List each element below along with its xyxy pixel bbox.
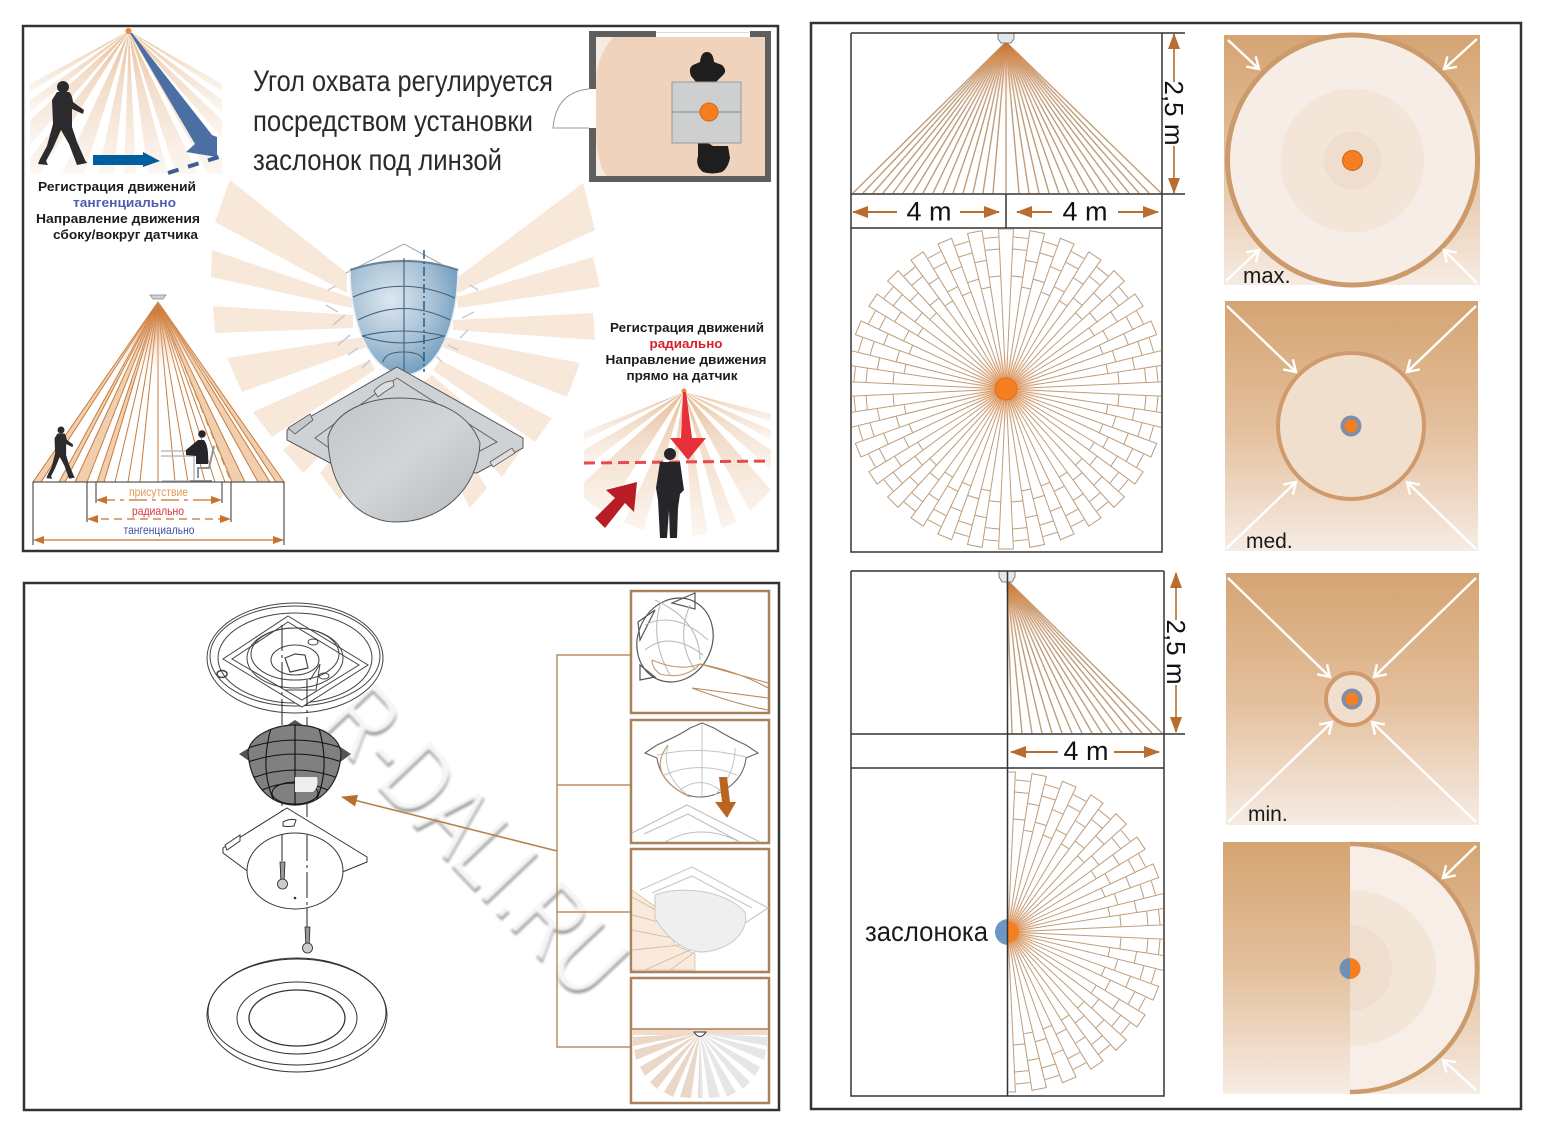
half disc top view xyxy=(1008,772,1163,1092)
coverage: half with shutter xyxy=(1223,842,1480,1094)
step four: resulting pattern xyxy=(631,978,769,1103)
axis over dome xyxy=(282,835,307,925)
tangential fan xyxy=(30,31,222,174)
title: заслонок под линзой xyxy=(253,144,502,177)
caption: radial: Направление движения xyxy=(606,352,766,367)
person head xyxy=(58,426,64,434)
shutter label: заслонока xyxy=(865,916,988,947)
tangential ray arrow xyxy=(130,33,217,157)
person bottom xyxy=(697,143,730,174)
range labels xyxy=(124,485,195,537)
plate clip left xyxy=(288,414,313,434)
caption: tangential xyxy=(36,179,200,242)
caption: tangential: тангенциально xyxy=(73,195,176,210)
door xyxy=(553,89,589,128)
plate clip top xyxy=(374,381,394,397)
title: Угол охвата регулируется xyxy=(253,65,553,98)
ceiling sensor xyxy=(150,295,166,299)
step one: fit shutter xyxy=(623,585,769,713)
title xyxy=(253,65,553,177)
coverage: med: med. xyxy=(1246,530,1293,553)
height dimension upper: 2,5 m xyxy=(1159,80,1189,146)
dashed movement boundary xyxy=(168,156,222,173)
coverage: min: min. xyxy=(1248,803,1288,826)
presence cone xyxy=(33,295,284,545)
sensor dot xyxy=(700,103,718,121)
caption: radial: Регистрация движений xyxy=(610,320,764,335)
half cone side view xyxy=(999,571,1162,733)
panel: assembly xyxy=(24,583,779,1110)
central fan of rays xyxy=(211,180,600,508)
table xyxy=(672,82,741,143)
width dimension right: 4 m xyxy=(1062,196,1108,226)
screw two xyxy=(302,927,312,953)
sensor point xyxy=(126,28,132,34)
full disc top view xyxy=(845,228,1167,550)
width dimension lower: 4 m xyxy=(1063,736,1109,766)
frame upper xyxy=(851,33,1185,552)
coverage: max xyxy=(1224,35,1480,288)
room plan xyxy=(553,31,771,182)
plate clip right xyxy=(490,448,515,467)
standing person xyxy=(656,448,684,538)
watermark: R-DALI.RU xyxy=(302,663,650,1021)
top mounting ring xyxy=(207,603,383,713)
caption: tangential: сбоку/вокруг датчика xyxy=(53,227,199,242)
sensor xyxy=(999,571,1015,582)
caption: radial xyxy=(606,320,766,383)
pointer arrow xyxy=(342,797,557,851)
red dashed line xyxy=(584,461,771,463)
person top xyxy=(690,52,725,82)
range labels: радиально xyxy=(132,504,184,518)
sensor dot xyxy=(995,378,1017,400)
person head xyxy=(57,81,69,93)
insertion arrow xyxy=(715,777,736,818)
screw one xyxy=(278,862,288,889)
lens shutter frame xyxy=(346,244,458,273)
height dimension lower: 2,5 m xyxy=(1161,619,1191,685)
panel: coverage xyxy=(811,23,1521,1109)
seated person at desk xyxy=(161,451,195,481)
big red arrow xyxy=(595,482,637,528)
caption: tangential: Направление движения xyxy=(36,211,200,226)
sensor xyxy=(998,33,1014,43)
caption: radial: прямо на датчик xyxy=(626,368,738,383)
bottom ring xyxy=(207,958,387,1072)
shutter dot xyxy=(995,919,1019,945)
person walking xyxy=(38,92,87,165)
assembly axis lines xyxy=(282,625,307,927)
full cone side view xyxy=(852,33,1162,193)
step two: insert lens xyxy=(631,720,769,843)
step three: shutter fitted xyxy=(631,849,769,972)
radial fan xyxy=(584,392,771,536)
dome hole xyxy=(294,897,296,899)
coverage: med xyxy=(1225,301,1478,553)
lens shutter slats xyxy=(326,285,478,368)
lens xyxy=(350,250,458,375)
movement arrow xyxy=(93,152,160,167)
dome module xyxy=(223,808,367,909)
radial red ray arrow xyxy=(670,392,706,460)
range labels: тангенциально xyxy=(124,523,195,537)
dimension lines xyxy=(33,482,284,545)
person at left xyxy=(46,433,75,479)
caption: tangential: Регистрация движений xyxy=(38,179,196,194)
frame lower xyxy=(851,571,1185,1096)
dome xyxy=(328,398,480,522)
title: посредством установки xyxy=(253,105,533,138)
radial sensor point xyxy=(682,388,686,394)
range labels: присутствие xyxy=(129,485,188,499)
width dimension left: 4 m xyxy=(906,196,952,226)
coverage: min xyxy=(1226,573,1479,826)
connector lines xyxy=(557,655,631,1047)
base plate xyxy=(287,367,523,473)
caption: radial: радиально xyxy=(650,336,723,351)
dark lens xyxy=(239,720,351,805)
panel: detection modes xyxy=(23,26,778,551)
coverage: max: max. xyxy=(1243,263,1291,288)
